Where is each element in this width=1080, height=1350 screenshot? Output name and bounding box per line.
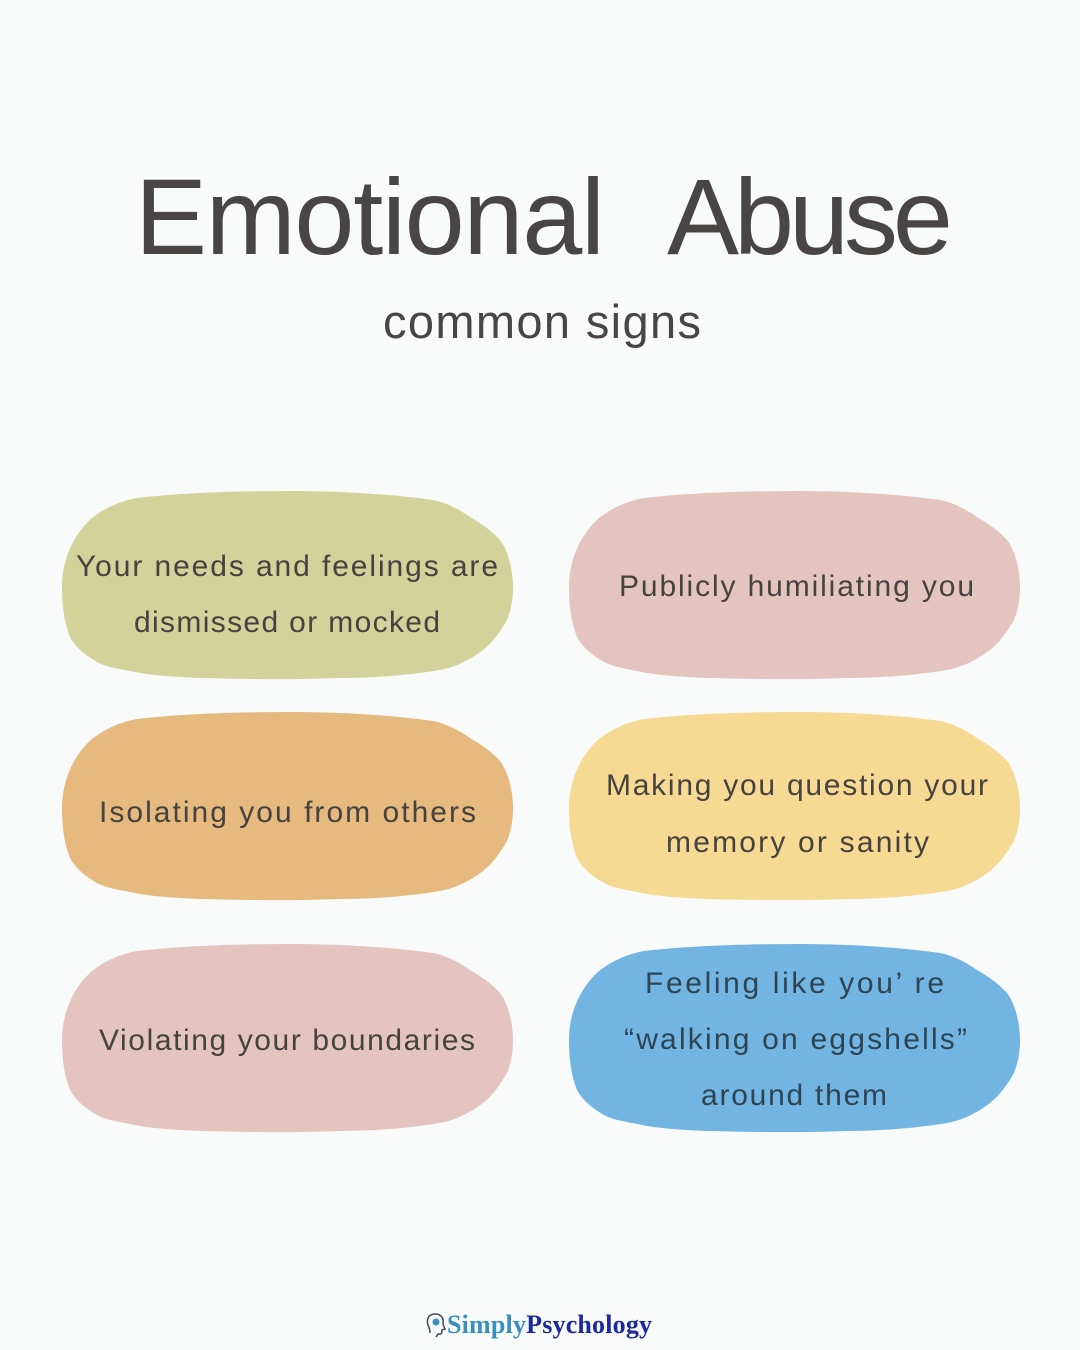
- title: Emotional: [135, 156, 605, 277]
- panel: questioning memory: [569, 712, 1020, 900]
- panel: violating boundaries: [62, 944, 513, 1132]
- title: Abuse: [667, 156, 953, 277]
- panel: walking on eggshells: “walking on eggshells”: [624, 1023, 967, 1056]
- panel: questioning memory: memory or sanity: [666, 826, 929, 859]
- footer logo: [427, 1310, 652, 1339]
- panel: isolation: [62, 712, 513, 900]
- panel: public humiliation: [569, 491, 1020, 679]
- panel: walking on eggshells: Feeling like you’ re: [645, 967, 944, 1000]
- panel: dismissed or mocked: Your needs and feelings are: [76, 550, 498, 583]
- subtitle: common signs: [383, 295, 701, 348]
- panel: walking on eggshells: [569, 944, 1020, 1132]
- title: [135, 156, 953, 277]
- panel: isolation: Isolating you from others: [99, 796, 476, 829]
- panel: dismissed or mocked: [62, 491, 513, 679]
- panel: public humiliation: Publicly humiliating you: [619, 570, 974, 603]
- panel: questioning memory: Making you question your: [606, 769, 988, 802]
- panel: violating boundaries: Violating your boundaries: [99, 1024, 475, 1057]
- icon: head with light bulb: [427, 1314, 445, 1337]
- panel: walking on eggshells: around them: [701, 1079, 887, 1112]
- logo wordmark: SimplyPsychology: [447, 1310, 652, 1339]
- panel: dismissed or mocked: dismissed or mocked: [134, 606, 440, 639]
